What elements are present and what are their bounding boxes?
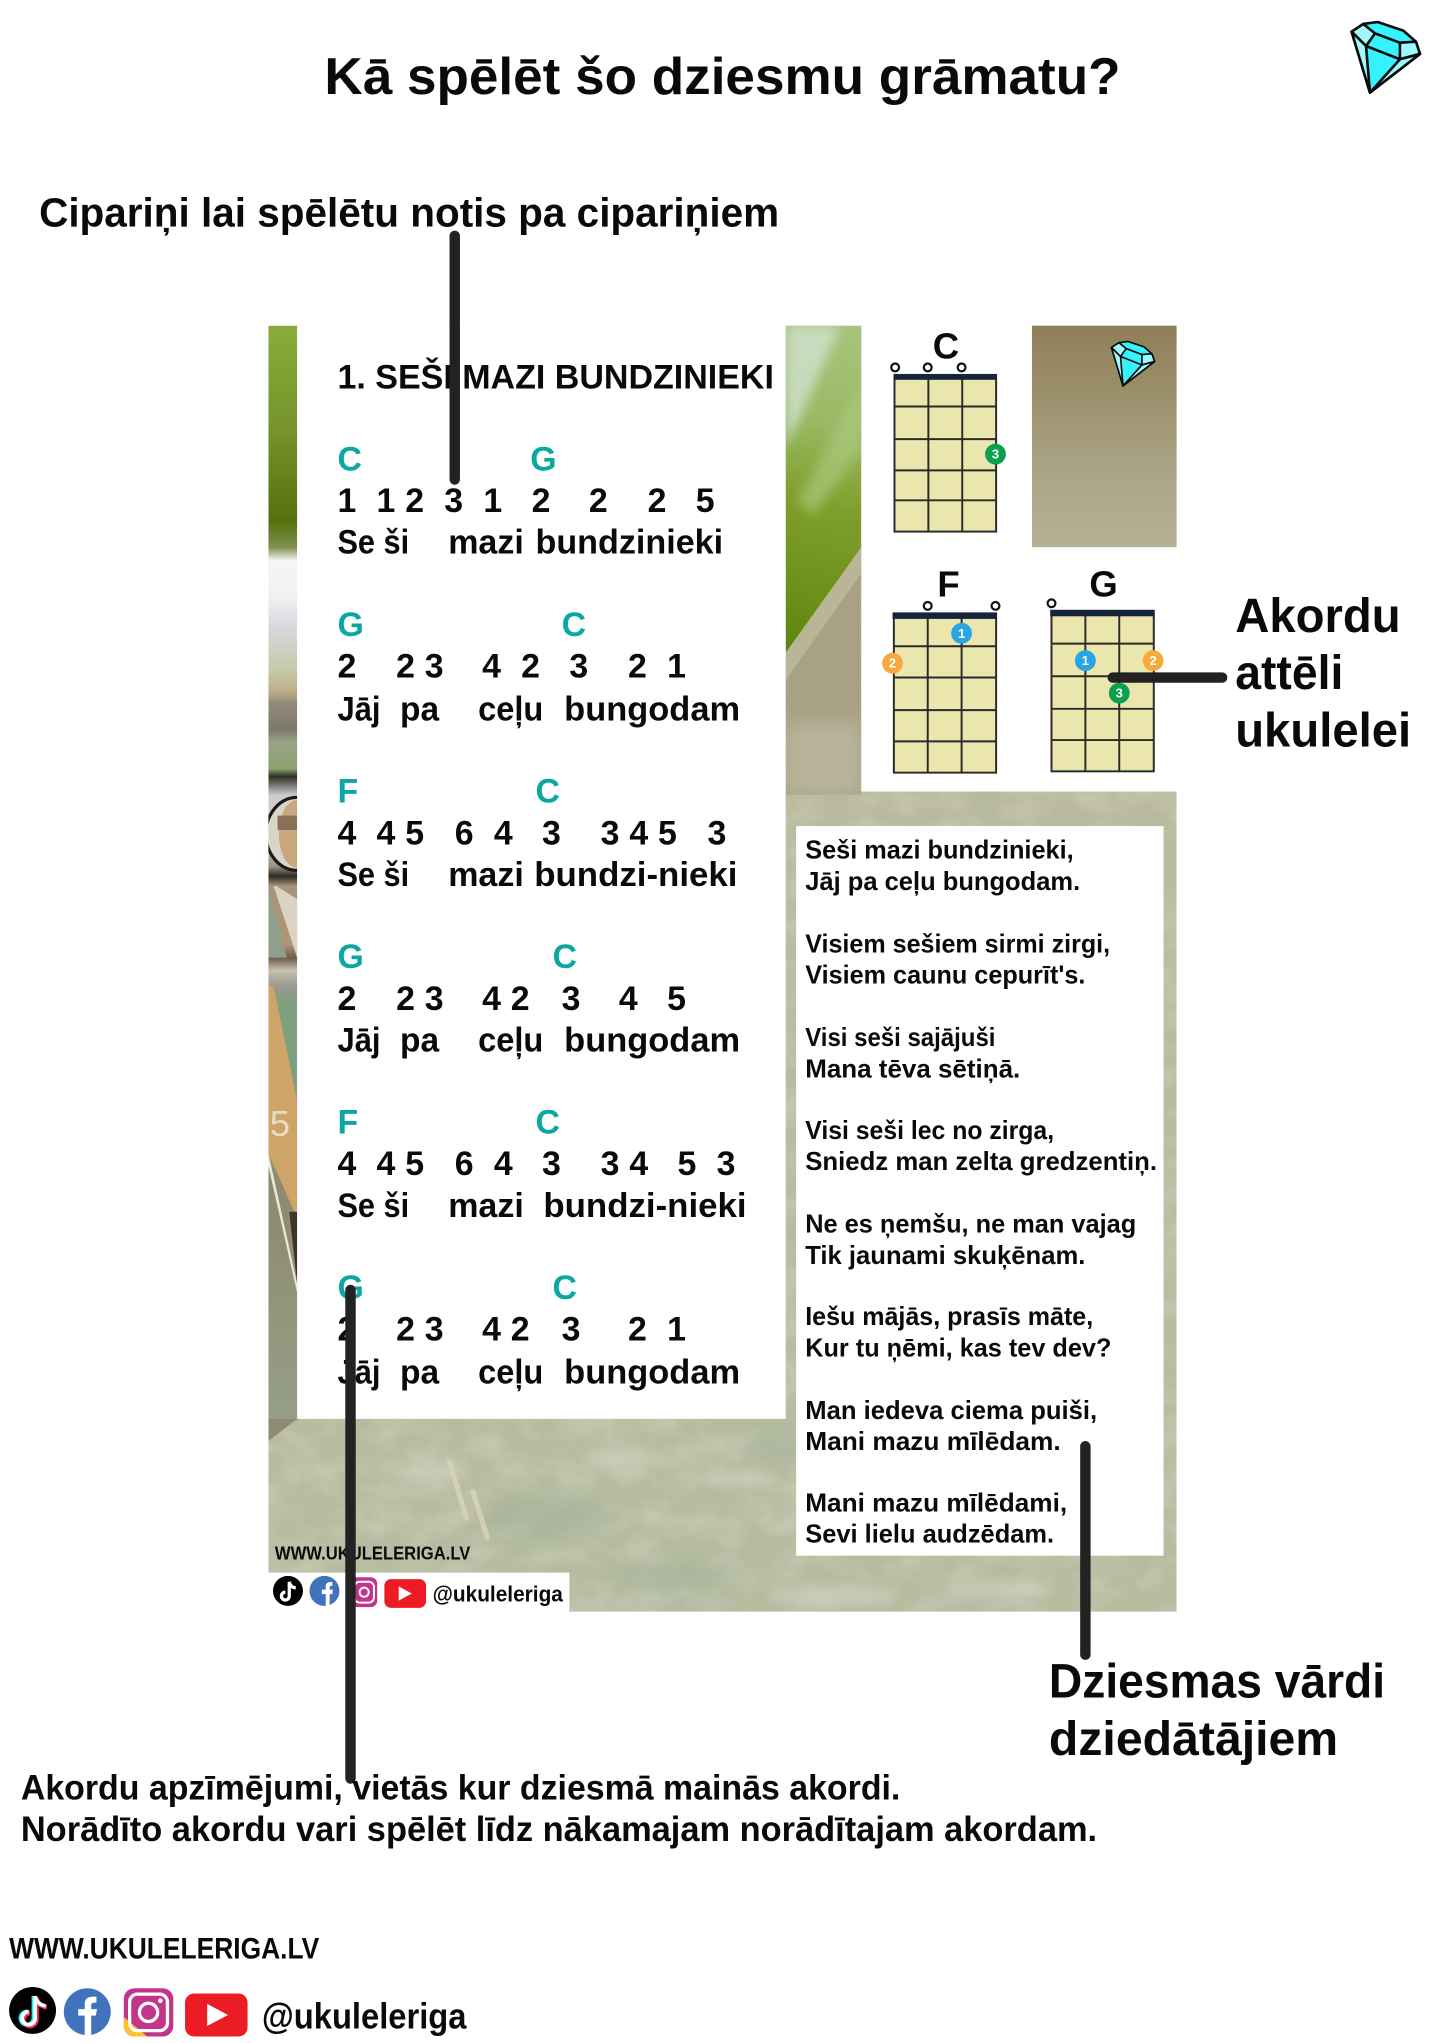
callout: chord images: Akordu [1235,589,1401,643]
panel: lyrics: Ne es ņemšu, ne man vajag [805,1209,1136,1239]
callout: chord symbols explanation: Norādīto akordu vari spēlēt līdz nākamajam norādītajam akordam. [21,1810,1097,1849]
sheet website: WWW.UKULELERIGA.LV [275,1543,471,1564]
callout: chord images: ukulelei [1235,704,1411,758]
panel: song sheet white column [297,326,786,1419]
verse line 2: pa [400,691,440,729]
panel: lyrics: Mana tēva sētiņā. [805,1054,1020,1084]
arrow: chord images pointer [1113,674,1222,682]
chord diagram: C: C [933,325,959,366]
arrow: lyrics pointer [1081,1446,1089,1655]
callout: song lyrics [1049,1655,1385,1766]
verse line 5 [337,1104,747,1225]
panel: lyrics: Visi seši sajājuši [805,1022,995,1052]
verse line 1: bundzinieki [536,524,723,562]
panel: chord diagrams white area [861,326,1177,792]
verse line 5: mazi [448,1187,524,1225]
left photo strip: 5 [270,1103,290,1144]
chord diagram: G: 2 [1150,653,1157,668]
verse line 1: mazi [448,524,524,562]
verse line 3: Se ši [337,856,409,894]
verse line 4: bungodam [564,1021,740,1059]
left photo strip [268,326,298,1441]
verse line 6: GC [337,1269,577,1307]
verse line 1: CG [337,440,557,478]
icon: diamond top right [1352,22,1420,93]
verse line 3 [337,773,737,894]
verse line 2: Jāj [337,691,380,729]
panel: lyrics: Sniedz man zelta gredzentiņ. [805,1146,1157,1176]
verse line 5: bundzi-nieki [543,1187,747,1225]
verse line 4: ceļu [478,1021,543,1059]
heading: numbers callout: Cipariņi lai spēlētu notis pa cipariņiem [39,190,779,236]
verse line 4: GC [337,938,577,976]
panel: lyrics: Man iedeva ciema puiši, [805,1395,1097,1425]
verse line 6: 22342321 [337,1311,686,1349]
verse line 2 [337,606,740,729]
callout: chord symbols explanation [21,1768,1097,1849]
verse line 3: mazi [448,856,524,894]
verse line 6: ceļu [478,1354,543,1392]
panel: lyrics: Jāj pa ceļu bungodam. [805,866,1080,896]
chord diagram: C [891,325,1006,532]
callout: song lyrics: Dziesmas vārdi [1049,1655,1385,1709]
photo window with diamond [1032,326,1177,547]
callout: song lyrics: dziedātājiem [1049,1712,1338,1766]
verse line 3: FC [337,773,560,811]
panel: lyrics: Visiem caunu cepurīt's. [805,960,1085,990]
chord diagram: G [1048,564,1164,771]
song title: 1. SEŠI MAZI BUNDZINIEKI [337,357,774,396]
verse line 3: bundzi-nieki [534,856,737,894]
sheet social strip [268,1573,569,1612]
callout: chord symbols explanation: Akordu apzīmējumi, vietās kur dziesmā mainās akordi. [21,1768,900,1807]
footer website: WWW.UKULELERIGA.LV [9,1932,319,1965]
verse line 5: 4456433453 [337,1145,735,1183]
icon: facebook [64,1988,111,2035]
panel: lyrics: Visi seši lec no zirga, [805,1115,1054,1145]
panel: lyrics: Mani mazu mīlēdam. [805,1426,1061,1456]
verse line 2: 22342321 [337,648,686,686]
panel: lyrics: Iešu mājās, prasīs māte, [805,1301,1093,1331]
chord diagram: C: 3 [992,447,999,462]
chord diagram: F: 2 [889,656,896,671]
arrow: chord labels pointer [347,1290,355,1779]
verse line 5: Se ši [337,1187,409,1225]
icon: tiktok [9,1987,56,2034]
verse line 6 [337,1269,740,1392]
right photo strip [786,326,861,795]
chord diagram: F [882,564,999,773]
panel: song sheet photo background [266,326,1177,1612]
verse line 4: 22342345 [337,980,686,1018]
verse line 2: ceļu [478,691,543,729]
verse line 3: 4456433453 [337,814,726,852]
verse line 1: 112312225 [337,482,715,520]
footer social icons and handle [9,1987,467,2037]
verse line 6: pa [400,1354,440,1392]
panel: lyrics: Kur tu ņēmi, kas tev dev? [805,1332,1111,1362]
verse line 5: FC [337,1104,560,1142]
panel: lyrics: Visiem sešiem sirmi zirgi, [805,928,1110,958]
verse line 6: Jāj [337,1354,380,1392]
callout: chord images: attēli [1235,646,1343,700]
arrow: numbers pointer [451,236,459,479]
panel: lyrics: Mani mazu mīlēdami, [805,1487,1067,1517]
icon: youtube [185,1993,248,2036]
verse line 4: Jāj [337,1021,380,1059]
panel: lyrics: Tik jaunami skuķēnam. [805,1240,1085,1270]
chord diagram: F: 1 [958,626,965,641]
sheet social strip: @ukuleleriga [433,1581,564,1606]
verse line 4 [337,938,740,1059]
verse line 2: GC [337,606,586,644]
panel: lyrics: Sevi lielu audzēdam. [805,1519,1054,1549]
icon: instagram [124,1988,173,2036]
verse line 6: bungodam [564,1354,740,1392]
chord diagram: G: 1 [1082,653,1089,668]
verse line 4: pa [400,1021,440,1059]
title: Kā spēlēt šo dziesmu grāmatu? [324,48,1121,106]
footer handle: @ukuleleriga [262,1996,467,2037]
chord diagram: F: F [937,564,960,605]
verse line 2: bungodam [564,691,740,729]
verse line 1 [337,440,723,562]
chord diagram: G: 3 [1116,686,1123,701]
chord diagram: G: G [1089,564,1118,605]
panel: lyrics: Seši mazi bundzinieki, [805,835,1074,865]
callout: chord images [1235,589,1411,758]
panel: lyrics [796,826,1164,1556]
verse line 1: Se ši [337,524,409,562]
